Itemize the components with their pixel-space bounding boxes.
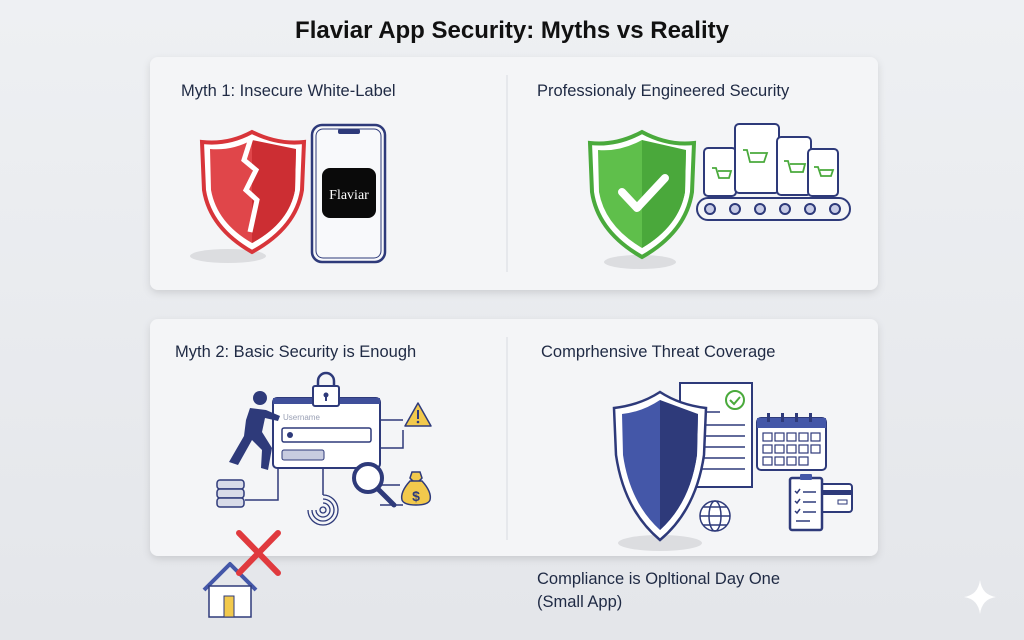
icon: phone with Flaviar app: Flaviar	[329, 188, 369, 203]
icon: sparkle	[964, 580, 996, 614]
title: Flaviar App Security: Myths vs Reality	[295, 17, 730, 44]
icon: document	[680, 383, 752, 487]
icon: money bag: $	[412, 488, 420, 504]
icon: broken red shield	[190, 132, 304, 263]
icon: phone with Flaviar app	[312, 125, 385, 262]
heading: myth 1: Myth 1: Insecure White-Label	[181, 82, 396, 100]
icon: magnifier	[354, 464, 394, 505]
text: compliance myth	[537, 570, 780, 611]
icon: blue shield	[614, 392, 706, 540]
heading: myth 2: Myth 2: Basic Security is Enough	[175, 343, 416, 361]
icon: green check shield	[590, 132, 694, 269]
panel: myth 2	[150, 319, 878, 556]
heading: reality 2: Comprhensive Threat Coverage	[541, 343, 775, 361]
icon: fingerprint	[308, 495, 338, 525]
icon: money bag	[402, 472, 430, 505]
icon: person pushing	[229, 391, 280, 470]
icon: warning	[405, 403, 431, 426]
icon: padlock	[313, 373, 339, 406]
icon: database	[217, 480, 244, 507]
heading: reality 1: Professionaly Engineered Security	[537, 82, 790, 100]
icon: credit card	[814, 484, 852, 512]
illustration: login under attack	[217, 373, 431, 525]
text: compliance myth: Compliance is Opltional Day One	[537, 570, 780, 588]
icon: globe	[700, 501, 730, 531]
text: compliance myth: (Small App)	[537, 593, 622, 611]
icon: phones on conveyor	[697, 124, 850, 220]
icon: house with red X	[204, 533, 278, 617]
icon: calendar	[757, 413, 826, 470]
illustration: login under attack: Username	[283, 413, 320, 422]
panel: myth 1	[150, 57, 878, 290]
illustration: compliance shield	[614, 383, 852, 551]
icon: clipboard	[790, 474, 822, 530]
